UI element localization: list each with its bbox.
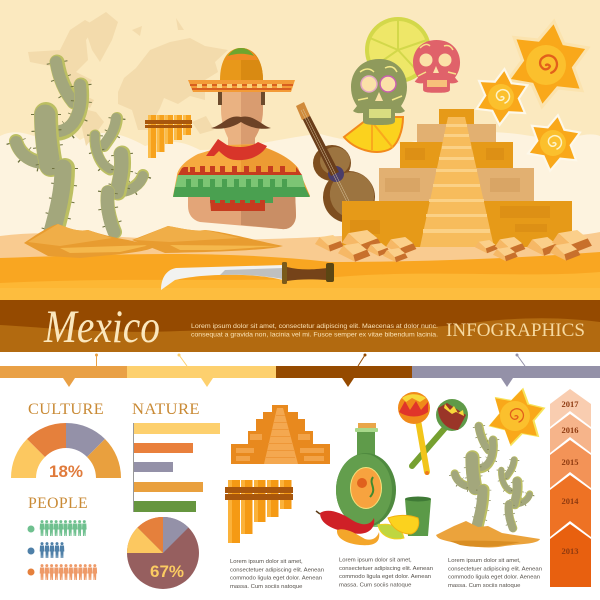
clouds <box>0 126 600 245</box>
band description: Lorem ipsum dolor sit amet, consectetur adipiscing elit. Maecenas at dolor nunc. <box>191 323 438 330</box>
text block 2: commodo ligula eget dolor. Aenean <box>339 574 431 580</box>
scarf <box>206 139 267 160</box>
timeline bar <box>0 354 600 387</box>
year labels <box>562 399 579 556</box>
text block 1: massa. Cum sociis natoque <box>230 584 303 590</box>
title band <box>0 300 600 353</box>
poncho <box>173 144 310 196</box>
mustache <box>211 117 271 129</box>
panpipe lower <box>225 480 293 543</box>
lemon half <box>344 117 403 152</box>
shot glass <box>405 496 431 536</box>
semi donut chart: 18% <box>49 462 83 481</box>
year labels: 2015 <box>562 457 578 467</box>
text block 1 <box>230 559 324 590</box>
title: Mexico <box>43 301 160 353</box>
chili peppers <box>316 511 379 545</box>
text block 2: massa. Cum sociis natoque <box>339 582 412 588</box>
text block 2: consectetuer adipiscing elit. Aenean <box>339 566 433 572</box>
panpipe top <box>145 115 192 158</box>
bar chart <box>133 423 220 512</box>
desert ground <box>0 232 600 300</box>
gold stones <box>315 230 592 262</box>
neck and face <box>221 92 241 155</box>
green skull <box>351 59 407 125</box>
year labels: 2016 <box>562 425 578 435</box>
people pictogram <box>28 520 97 580</box>
text block 1: Lorem ipsum dolor sit amet, <box>230 559 303 565</box>
text block 2: Lorem ipsum dolor sit amet, <box>339 558 412 564</box>
guitar <box>296 102 384 232</box>
text block 3: Lorem ipsum dolor sit amet, <box>448 558 521 564</box>
pie chart <box>127 517 199 589</box>
sombrero <box>220 48 263 80</box>
year labels: 2013 <box>562 546 578 556</box>
big sun <box>502 13 594 115</box>
cacti <box>16 62 143 232</box>
small sun 2 <box>524 110 584 176</box>
text block 1: commodo ligula eget dolor. Aenean <box>230 576 322 582</box>
text block 3: commodo ligula eget dolor. Aenean <box>448 575 540 581</box>
text block 3: consectetuer adipiscing elit. Aenean <box>448 566 542 572</box>
semi donut chart <box>11 423 121 481</box>
pink skull <box>413 40 460 93</box>
pyramid large <box>342 109 572 247</box>
mound lower <box>436 521 540 547</box>
heading: nature: NATURE <box>132 401 200 418</box>
text block 3: massa. Cum sociis natoque <box>448 583 521 589</box>
text block 1: consectetuer adipiscing elit. Aenean <box>230 567 324 573</box>
year labels: 2017 <box>562 399 579 409</box>
small sun 1 <box>474 65 530 129</box>
year arrows <box>550 389 591 587</box>
background sky <box>0 0 600 300</box>
band description <box>191 323 438 338</box>
maracas <box>398 392 468 475</box>
lime and lemon slices <box>378 515 419 539</box>
sand mounds <box>24 224 283 258</box>
heading: culture: CULTURE <box>28 401 104 418</box>
knife <box>161 262 334 290</box>
infographics label: INFOGRAPHICS <box>446 320 585 341</box>
heading: people: PEOPLE <box>28 495 88 512</box>
text block 2 <box>339 558 433 588</box>
torso <box>188 190 296 229</box>
bottle <box>336 423 396 527</box>
band description: consequat a gravida non, lacinia vel mi. Fusce semper ex vitae bibendum lacinia. <box>191 332 438 338</box>
world map <box>28 12 228 146</box>
sun lower <box>485 382 549 452</box>
pie chart: 67% <box>150 562 184 581</box>
text block 3 <box>448 558 542 589</box>
pyramid small <box>231 405 330 464</box>
year labels: 2014 <box>562 496 579 506</box>
lemon slice <box>365 17 431 83</box>
man with sombrero <box>173 48 310 229</box>
cactus lower <box>455 426 530 528</box>
